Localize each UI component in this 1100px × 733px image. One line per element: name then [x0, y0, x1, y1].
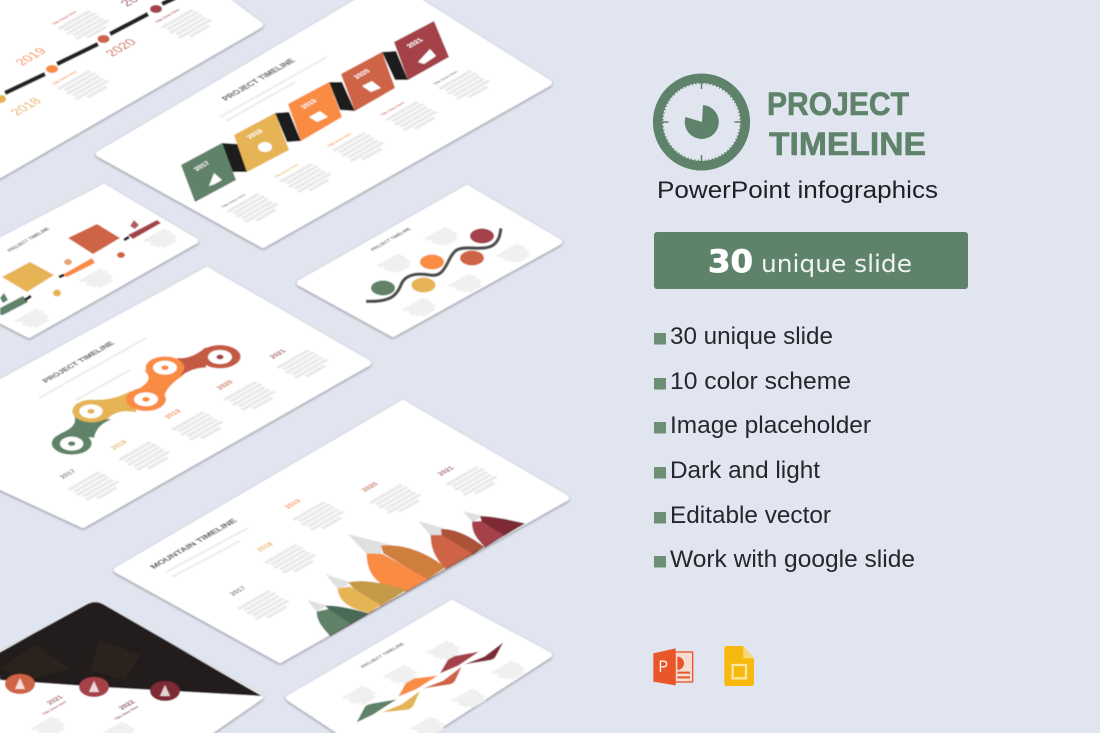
- text blocks: Title Goes Here: [220, 193, 247, 208]
- text blocks: Title Goes Here: [379, 101, 406, 116]
- chain: [52, 345, 241, 455]
- feature list: [654, 323, 915, 573]
- panel 2018: 2018: [246, 129, 265, 140]
- text blocks: Title Goes Here: [154, 8, 181, 23]
- item: 30 unique slide: 30 unique slide: [670, 323, 833, 350]
- year labels and text: 2021: [437, 466, 456, 477]
- slide: photo timeline: [0, 602, 262, 733]
- timeline markers: [5, 674, 180, 701]
- year labels and text: Title Goes Here: [41, 700, 68, 715]
- year labels and text: Title Goes Here: [113, 705, 140, 720]
- diamond ribbon: [357, 642, 503, 722]
- timeline bars: [5, 0, 177, 93]
- link: yellow: [72, 392, 135, 422]
- wave markers: [371, 228, 494, 296]
- panel 2021: [394, 21, 449, 80]
- year labels and text: 2019: [284, 499, 303, 510]
- heading: PROJECT TIMELINE: [40, 340, 116, 384]
- text blocks: Title Goes Here: [51, 10, 78, 25]
- year labels: 2020: [102, 37, 140, 58]
- item: Work with google slide: Work with google slide: [670, 546, 915, 573]
- year labels: 2019: [12, 46, 50, 67]
- subtitle lines: [220, 57, 327, 121]
- slide: folded ribbon project timeline: [99, 0, 549, 245]
- photo detail: [0, 640, 140, 680]
- text blocks: [220, 70, 493, 224]
- year labels and text: 2020: [361, 482, 380, 493]
- peak 2017: [307, 600, 369, 636]
- peak 2018: [326, 574, 407, 613]
- peak 2020: [418, 521, 484, 569]
- year labels and text: 2017: [229, 586, 248, 597]
- icon: PowerPoint: P: [659, 657, 668, 676]
- icon: clock: [658, 78, 745, 166]
- link: red: [178, 345, 241, 377]
- panel 2021: 2021: [406, 38, 425, 49]
- year labels: 2018: [7, 96, 45, 117]
- text blocks: [51, 8, 215, 102]
- slide: dotted timeline: [0, 0, 260, 180]
- title: PROJECT: [767, 86, 909, 122]
- peak 2019: [348, 534, 446, 592]
- banner: [654, 232, 968, 289]
- slide: mountain timeline: [117, 403, 566, 660]
- timeline dots: [0, 5, 162, 103]
- year labels and text: 2018: [256, 542, 275, 553]
- heading: PROJECT TIMELINE: [7, 227, 52, 253]
- item: Editable vector: Editable vector: [670, 502, 831, 529]
- year labels and text: 2022: [118, 700, 137, 711]
- year labels and text: 2018: [110, 440, 129, 451]
- slide: diamonds project timeline: [0, 187, 195, 335]
- diamonds and bars: [0, 220, 161, 315]
- item: Dark and light: Dark and light: [670, 457, 820, 484]
- markers: [0, 220, 139, 303]
- dark photo band: [0, 602, 262, 696]
- item: 10 color scheme: 10 color scheme: [670, 368, 851, 395]
- heading: PROJECT TIMELINE: [370, 227, 414, 252]
- subtitle lines: [166, 528, 248, 577]
- panel 2019: [288, 82, 342, 141]
- heading: PROJECT TIMELINE: [360, 642, 407, 669]
- year labels and text: 2017: [59, 469, 78, 480]
- subtitle lines: [39, 338, 146, 400]
- year labels and text: [33, 695, 140, 733]
- panel 2019: 2019: [300, 99, 319, 110]
- wave road: [366, 228, 501, 301]
- banner: unique slide: [761, 250, 912, 278]
- heading: MOUNTAIN TIMELINE: [148, 517, 240, 570]
- item: Image placeholder: Image placeholder: [670, 412, 871, 439]
- year labels and text: [59, 349, 331, 502]
- text blocks: [17, 229, 180, 330]
- title: TIMELINE: [769, 126, 926, 162]
- text blocks: Title Goes Here: [326, 132, 353, 147]
- link: green: [52, 417, 108, 455]
- panel 2017: [181, 143, 236, 202]
- slide: wave project timeline: [300, 188, 559, 334]
- icon: Google Slides: [724, 646, 754, 686]
- text blocks: [379, 227, 533, 318]
- icon: PowerPoint: [653, 648, 693, 685]
- panel 2020: 2020: [353, 69, 372, 80]
- text blocks: Title Goes Here: [51, 70, 78, 85]
- slide: ribbon diamonds timeline: [289, 603, 549, 733]
- heading: PROJECT TIMELINE: [219, 57, 298, 102]
- slide: chain project timeline: [0, 270, 368, 525]
- year labels and text: 2020: [216, 380, 235, 391]
- banner: 30: [708, 244, 753, 280]
- year labels: [7, 0, 155, 117]
- text blocks: [344, 641, 528, 733]
- year labels and text: 2019: [164, 409, 183, 420]
- panel 2020: [341, 52, 395, 111]
- connectors: [222, 51, 408, 172]
- text blocks: Title Goes Here: [432, 70, 459, 85]
- panel 2017: 2017: [193, 161, 212, 172]
- link: orange: [126, 356, 184, 411]
- year labels and text: [229, 466, 500, 622]
- mountains chart: [307, 511, 525, 636]
- ground edge: [330, 523, 525, 636]
- year labels and text: 2021: [46, 695, 65, 706]
- year labels and text: 2021: [269, 349, 288, 360]
- peak 2021: [463, 511, 525, 547]
- subtitle: PowerPoint infographics: [657, 177, 938, 204]
- text blocks: Title Goes Here: [273, 163, 300, 178]
- title: [767, 86, 926, 162]
- panel 2018: [234, 113, 289, 172]
